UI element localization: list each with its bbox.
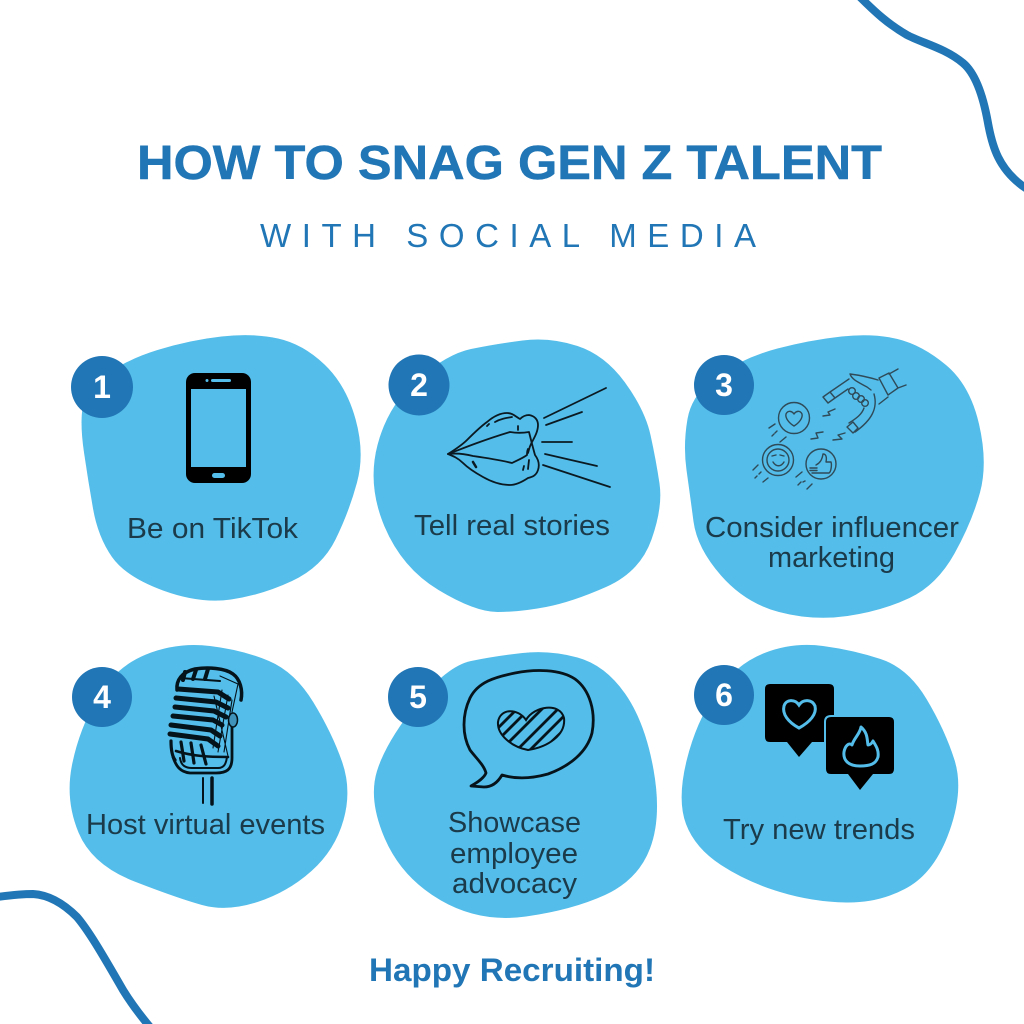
icon: magnet attracting reactions (753, 369, 906, 489)
icon: heart and flame notification bubbles (765, 684, 894, 790)
label: Consider influencer (705, 512, 960, 544)
icon: vintage microphone (170, 668, 242, 804)
blob background (685, 335, 984, 618)
number badge 2 (388, 354, 450, 416)
label line 2: marketing (768, 542, 895, 574)
blob background (374, 652, 657, 918)
number badge 6: 6 (715, 677, 733, 713)
icon: smartphone (186, 373, 251, 483)
blob background (82, 335, 361, 601)
blob background (682, 645, 958, 903)
number badge 5 (388, 667, 448, 727)
number badge 3 (694, 355, 754, 415)
blob background (70, 645, 347, 908)
label: Try new trends (723, 814, 915, 846)
panel: 1 be on TikTok (71, 335, 361, 601)
label: Tell real stories (414, 510, 610, 542)
panel: 6 try new trends (682, 645, 958, 903)
decorative curve: top right (860, 0, 1024, 189)
panel: 4 host virtual events (70, 645, 347, 908)
number badge 4: 4 (93, 679, 111, 715)
panel: 3 consider influencer marketing (685, 335, 984, 618)
label line 3: advocacy (452, 868, 578, 900)
label line 2: employee (450, 838, 578, 870)
title: HOW TO SNAG GEN Z TALENT (137, 136, 882, 190)
label: Showcase (448, 807, 581, 839)
number badge 4 (72, 667, 132, 727)
number badge 1 (71, 356, 133, 418)
icon: speech bubble with heart (464, 671, 593, 787)
number badge 1: 1 (93, 369, 111, 405)
number badge 5: 5 (409, 679, 427, 715)
label: Host virtual events (86, 809, 325, 841)
decorative curve: bottom left (0, 894, 150, 1024)
number badge 6 (694, 665, 754, 725)
panel: 2 tell real stories (374, 340, 660, 612)
blob background (374, 340, 660, 612)
number badge 2: 2 (410, 367, 428, 403)
icon: lips with sound rays (448, 388, 610, 487)
closing line: Happy Recruiting! (369, 952, 655, 988)
subtitle: WITH SOCIAL MEDIA (260, 217, 756, 254)
panel: 5 showcase employee advocacy (374, 652, 657, 918)
number badge 3: 3 (715, 367, 733, 403)
label: Be on TikTok (127, 513, 299, 545)
